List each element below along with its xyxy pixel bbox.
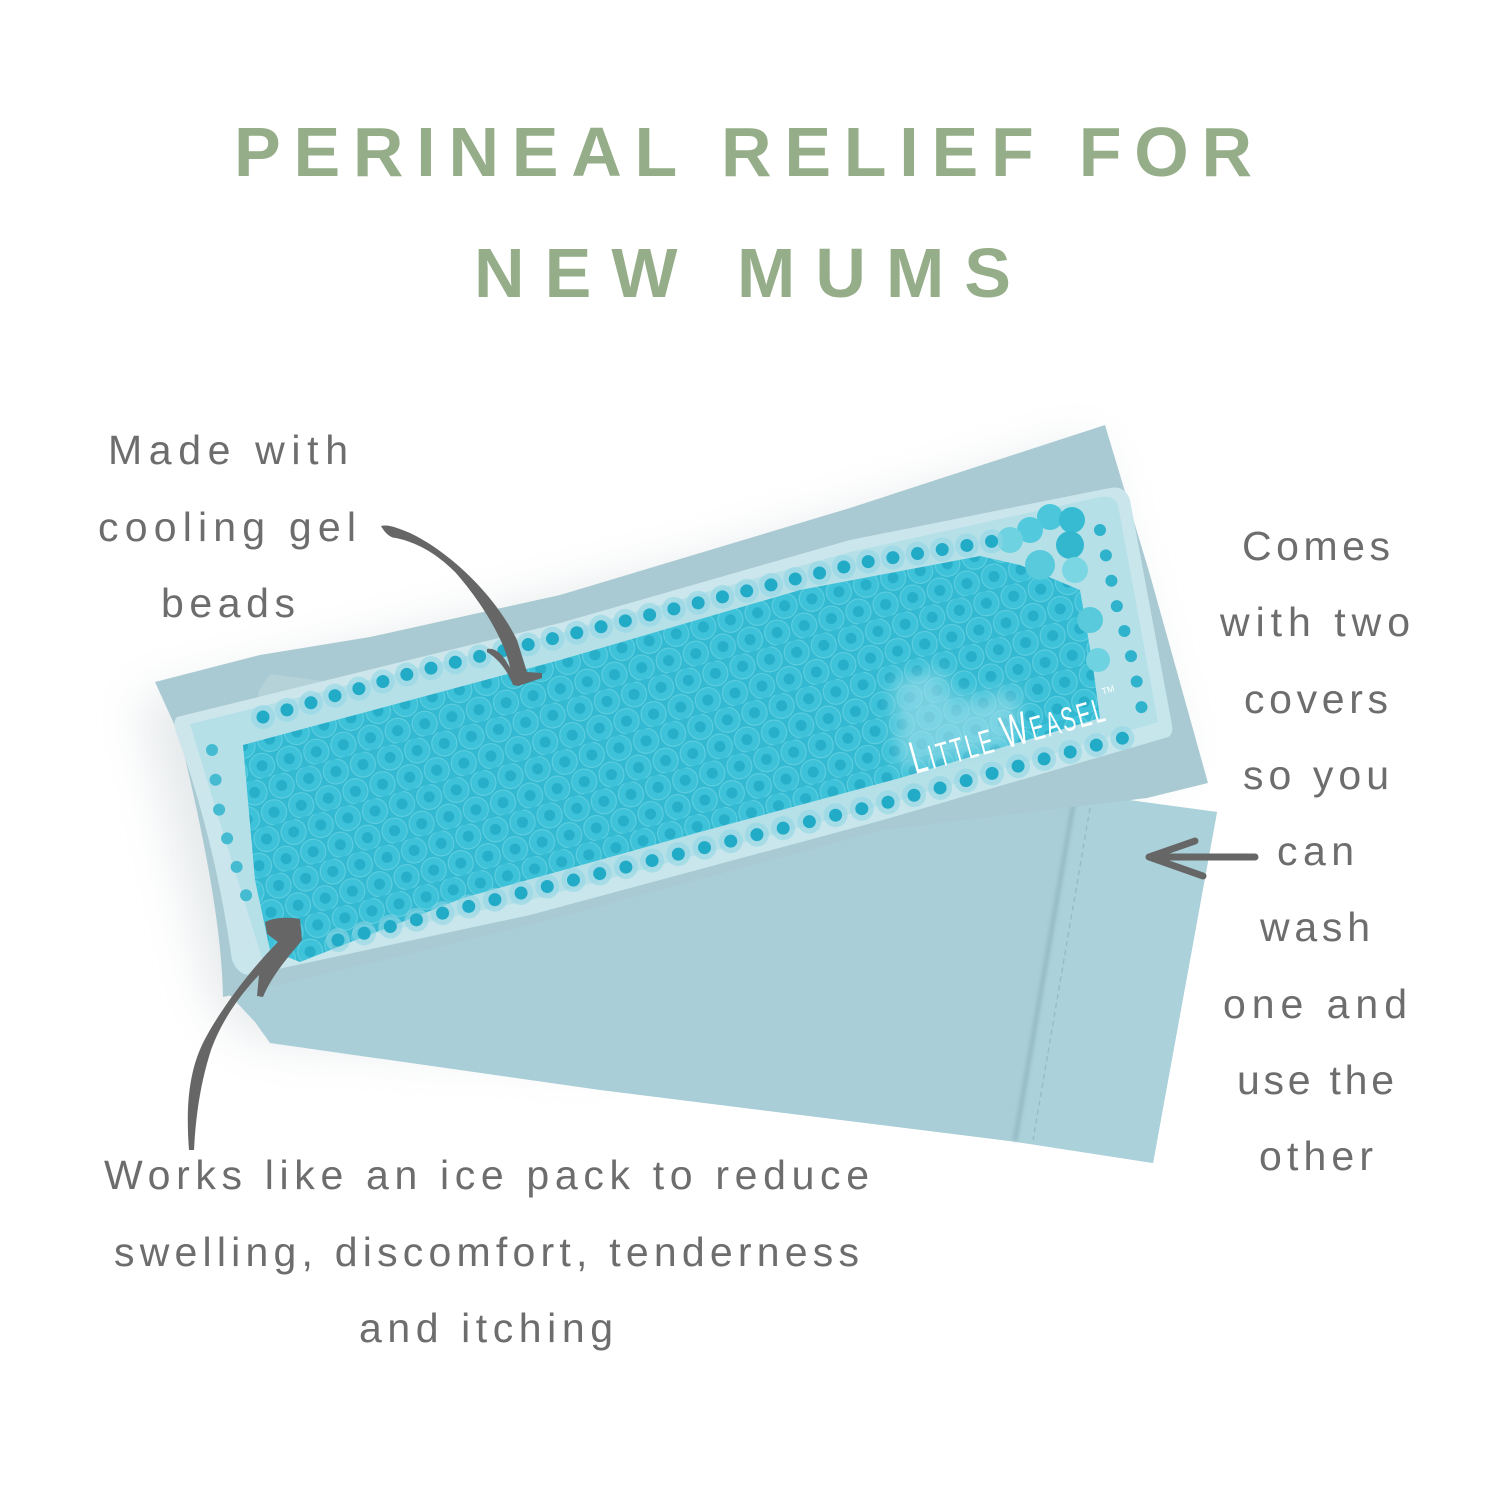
callout text: cooling gel beads: cooling gel <box>98 504 356 550</box>
title: NEW MUMS <box>474 234 1011 312</box>
product photo: gel pack on two covers <box>140 425 1217 1163</box>
title <box>234 113 1252 312</box>
clear patch around logo <box>892 668 1020 770</box>
callout text: two covers: use the <box>1237 1057 1394 1103</box>
gel beads body <box>243 556 1100 962</box>
pack inner seal edge <box>190 497 1158 958</box>
callout text: two covers: can <box>1277 828 1354 874</box>
edge beads: top row halo <box>263 540 1000 717</box>
callout text: two covers: with two <box>1219 599 1410 645</box>
lower cover <box>225 770 1217 1163</box>
callout text: ice pack benefits: and itching <box>359 1305 613 1351</box>
callout text: two covers: one and <box>1223 981 1407 1027</box>
callout text: two covers: Comes <box>1242 523 1390 569</box>
callout text: two covers: covers <box>1244 676 1388 722</box>
edge beads: bottom row halo <box>338 737 1127 940</box>
callout text: ice pack benefits: Works like an ice pack to reduce <box>104 1152 869 1198</box>
callout text: ice pack benefits: swelling, discomfort, tenderness <box>114 1229 859 1275</box>
edge beads: top row <box>263 540 1000 717</box>
title: PERINEAL RELIEF FOR <box>234 113 1252 191</box>
callout text: two covers: so you <box>1243 752 1389 798</box>
soft drop shadow <box>140 440 1180 1060</box>
callout text: cooling gel beads <box>98 427 356 626</box>
edge beads: bottom row <box>338 737 1127 940</box>
upper cover inner flap <box>258 674 345 720</box>
edge beads: left column <box>212 750 253 917</box>
upper cover <box>155 425 1208 997</box>
gel pack casing <box>174 488 1172 975</box>
arrow: to gel beads <box>381 525 542 686</box>
callout text: cooling gel beads: Made with <box>108 427 348 473</box>
arrow: to second cover <box>1149 841 1255 876</box>
edge beads: right column <box>1100 530 1142 710</box>
bead cluster top right <box>997 504 1110 672</box>
callout text: two covers: other <box>1259 1133 1373 1179</box>
pack logo: LITTLE WEASEL <box>904 682 1110 785</box>
callout text: two covers <box>1219 523 1410 1179</box>
callout text: ice pack benefits <box>104 1152 869 1351</box>
callout text: cooling gel beads: beads <box>161 580 295 626</box>
arrow: to pack corner <box>188 918 302 1150</box>
lower cover flap <box>1015 793 1217 1163</box>
callout text: two covers: wash <box>1259 904 1370 950</box>
pack logo: TM <box>1100 683 1116 697</box>
